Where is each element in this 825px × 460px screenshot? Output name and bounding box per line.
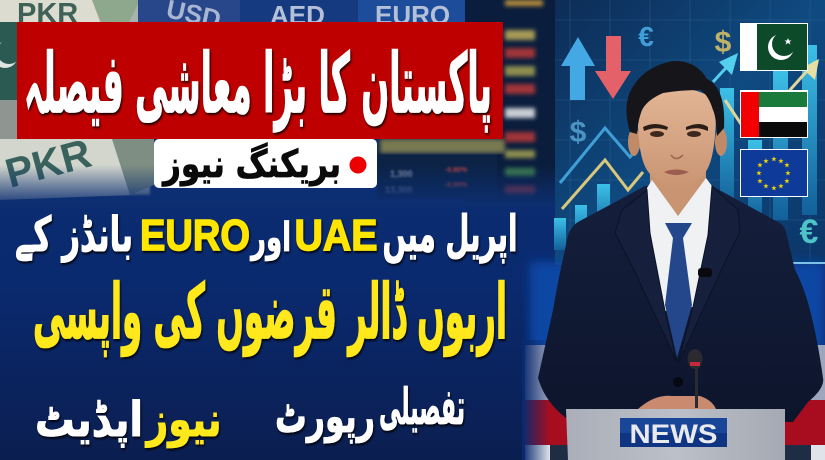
breaking news pill <box>154 139 377 188</box>
headline line 1: اور <box>250 215 291 261</box>
red title banner <box>17 22 503 139</box>
NEWS sign: NEWS <box>630 419 718 449</box>
eyebrows <box>643 124 708 131</box>
icon: dollar signs and euro signs <box>570 21 819 251</box>
flag: European Union: ★ <box>771 156 777 163</box>
icon: up arrow <box>561 37 595 100</box>
icon: down arrow <box>595 36 631 99</box>
trend lines <box>560 58 815 209</box>
chart bars <box>554 45 817 250</box>
text: تفصیلی <box>379 378 465 436</box>
ears <box>628 128 727 156</box>
background: currency collage: EURO <box>375 0 450 30</box>
news anchor <box>538 61 823 460</box>
flag: European Union <box>740 149 808 197</box>
flag: European Union: ★ <box>771 185 777 192</box>
flag: European Union: ★ <box>757 178 763 185</box>
flag: European Union: ★ <box>778 183 784 190</box>
background: currency collage: PKR <box>0 130 96 197</box>
flags <box>740 23 808 197</box>
flag: European Union: ★ <box>785 170 791 177</box>
background: currency collage: -0.80% <box>445 167 468 174</box>
hands <box>638 396 716 409</box>
background: currency collage: 13,300 <box>385 185 413 195</box>
desk microphone <box>688 349 702 408</box>
lapel microphone <box>698 268 712 277</box>
nose <box>671 155 683 158</box>
flag: European Union: ★ <box>784 178 790 185</box>
head <box>626 61 727 190</box>
background: currency collage <box>0 0 565 207</box>
hair <box>626 61 724 136</box>
background: studio lights, lower right and left of anchor <box>522 262 825 460</box>
face <box>638 88 716 190</box>
flag: European Union: ★ <box>784 162 790 169</box>
flag: European Union: ★ <box>763 158 769 165</box>
icon: dollar signs and euro signs: € <box>638 21 654 52</box>
chart arrowheads <box>719 53 819 80</box>
jacket button <box>673 377 683 387</box>
icon: dollar signs and euro signs: $ <box>715 26 732 59</box>
flag: Pakistan <box>740 23 808 71</box>
headline line 1: اپریل میں <box>382 205 518 264</box>
tie <box>665 223 692 358</box>
icon: dollar signs and euro signs: € <box>800 213 819 251</box>
lips <box>664 170 689 175</box>
news desk <box>566 409 785 460</box>
flag: European Union: ★ <box>778 158 784 165</box>
pill text: بریکنگ نیوز <box>161 142 341 186</box>
background: right chart panel <box>554 0 825 265</box>
detailed report caption <box>275 378 465 444</box>
background: currency collage: AED <box>270 0 325 30</box>
suit <box>538 186 823 422</box>
detailed report caption: رپورٹ <box>275 389 375 444</box>
eyes <box>650 131 701 137</box>
flag: European Union: ★ <box>756 170 762 177</box>
news update caption: اپڈیٹ <box>35 392 143 448</box>
headline line 1 <box>15 205 518 264</box>
lapels <box>615 186 740 364</box>
headline line 1: EURO <box>140 211 250 260</box>
headline line 1: بانڈز کے <box>15 207 133 263</box>
flag: European Union: ★ <box>763 183 769 190</box>
background: currency collage: 1,300 <box>390 169 413 179</box>
headline line 1: UAE <box>294 211 378 260</box>
news update caption: نیوز <box>145 392 222 448</box>
background: currency collage: -0.90% <box>445 182 468 189</box>
neck <box>650 170 706 216</box>
red dot <box>350 156 366 174</box>
icon: dollar signs and euro signs: $ <box>570 116 587 149</box>
flag: UAE <box>740 90 808 138</box>
shirt <box>647 178 712 311</box>
flag: European Union: ★ <box>757 162 763 169</box>
